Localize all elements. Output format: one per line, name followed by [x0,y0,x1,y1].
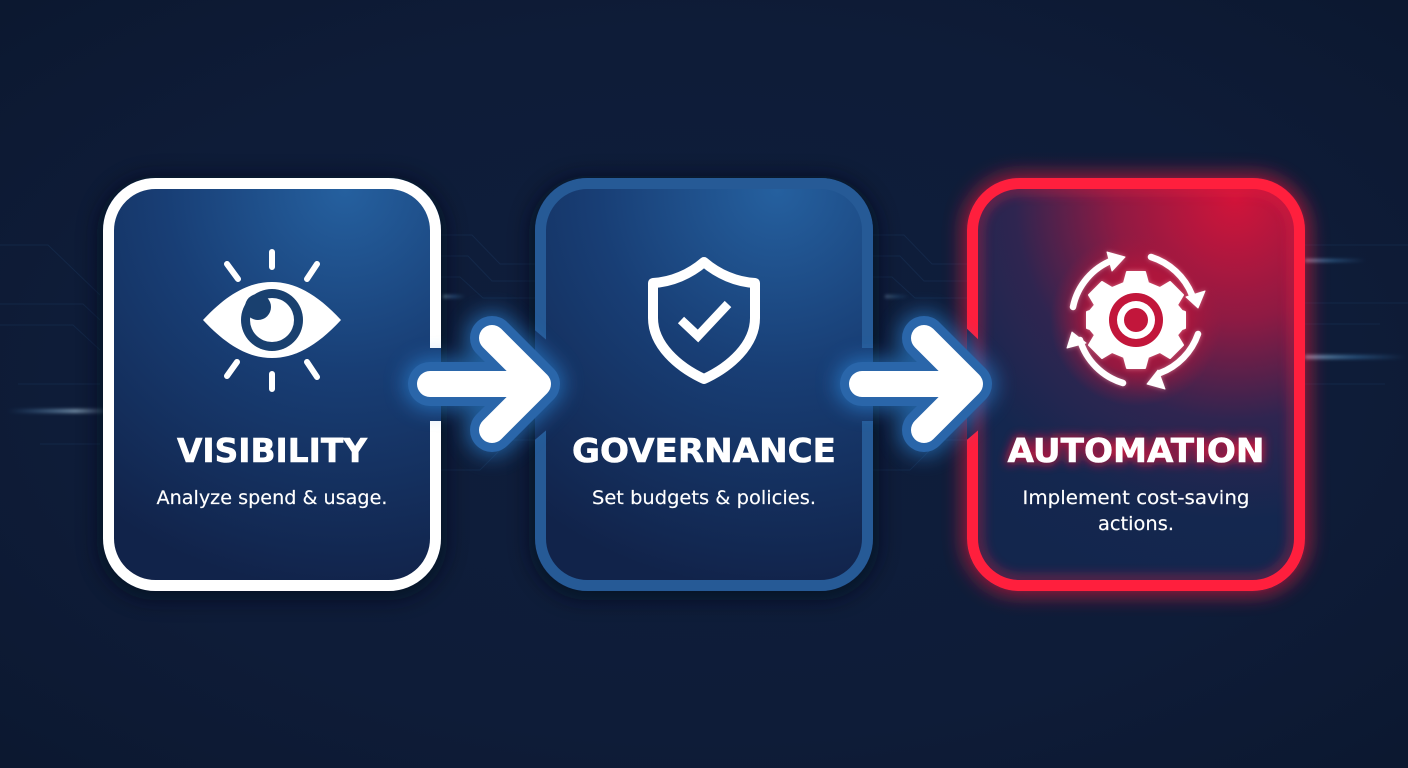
card 3 inner glow [978,189,1294,580]
card 1 body [103,178,441,591]
text: governance description: Set budgets & policies. [592,487,816,509]
panel: visibility [97,176,447,600]
gear halo [1050,234,1222,406]
card 2 shadow [529,176,879,600]
card 3 outer glow [972,183,1300,586]
card 2 border [540,184,868,586]
heading: governance: GOVERNANCE [572,431,836,470]
text: automation description [1022,487,1250,535]
text: automation description: actions. [1098,513,1174,535]
decorative circuit lines and light streaks [0,235,1408,470]
panel: automation [967,178,1305,591]
card 2 body [535,178,873,591]
card 3 body [967,178,1305,591]
text: automation description: Implement cost-saving [1022,487,1250,509]
card 1 border [108,184,436,586]
heading: automation: AUTOMATION [1008,431,1264,470]
text: visibility description: Analyze spend & usage. [156,487,388,509]
icon: eye [203,252,341,389]
card 3 border [972,184,1300,586]
arrow: governance to automation [862,338,970,430]
icon: shield with check [653,262,755,379]
gear and arrows [1067,252,1205,389]
card 1 shadow [97,176,447,600]
icon: gear with cycle arrows [1050,234,1222,406]
heading: automation glow: AUTOMATION [1008,431,1264,470]
heading: visibility: VISIBILITY [177,431,368,470]
panel: governance [529,176,879,600]
arrow: visibility to governance [430,338,538,430]
